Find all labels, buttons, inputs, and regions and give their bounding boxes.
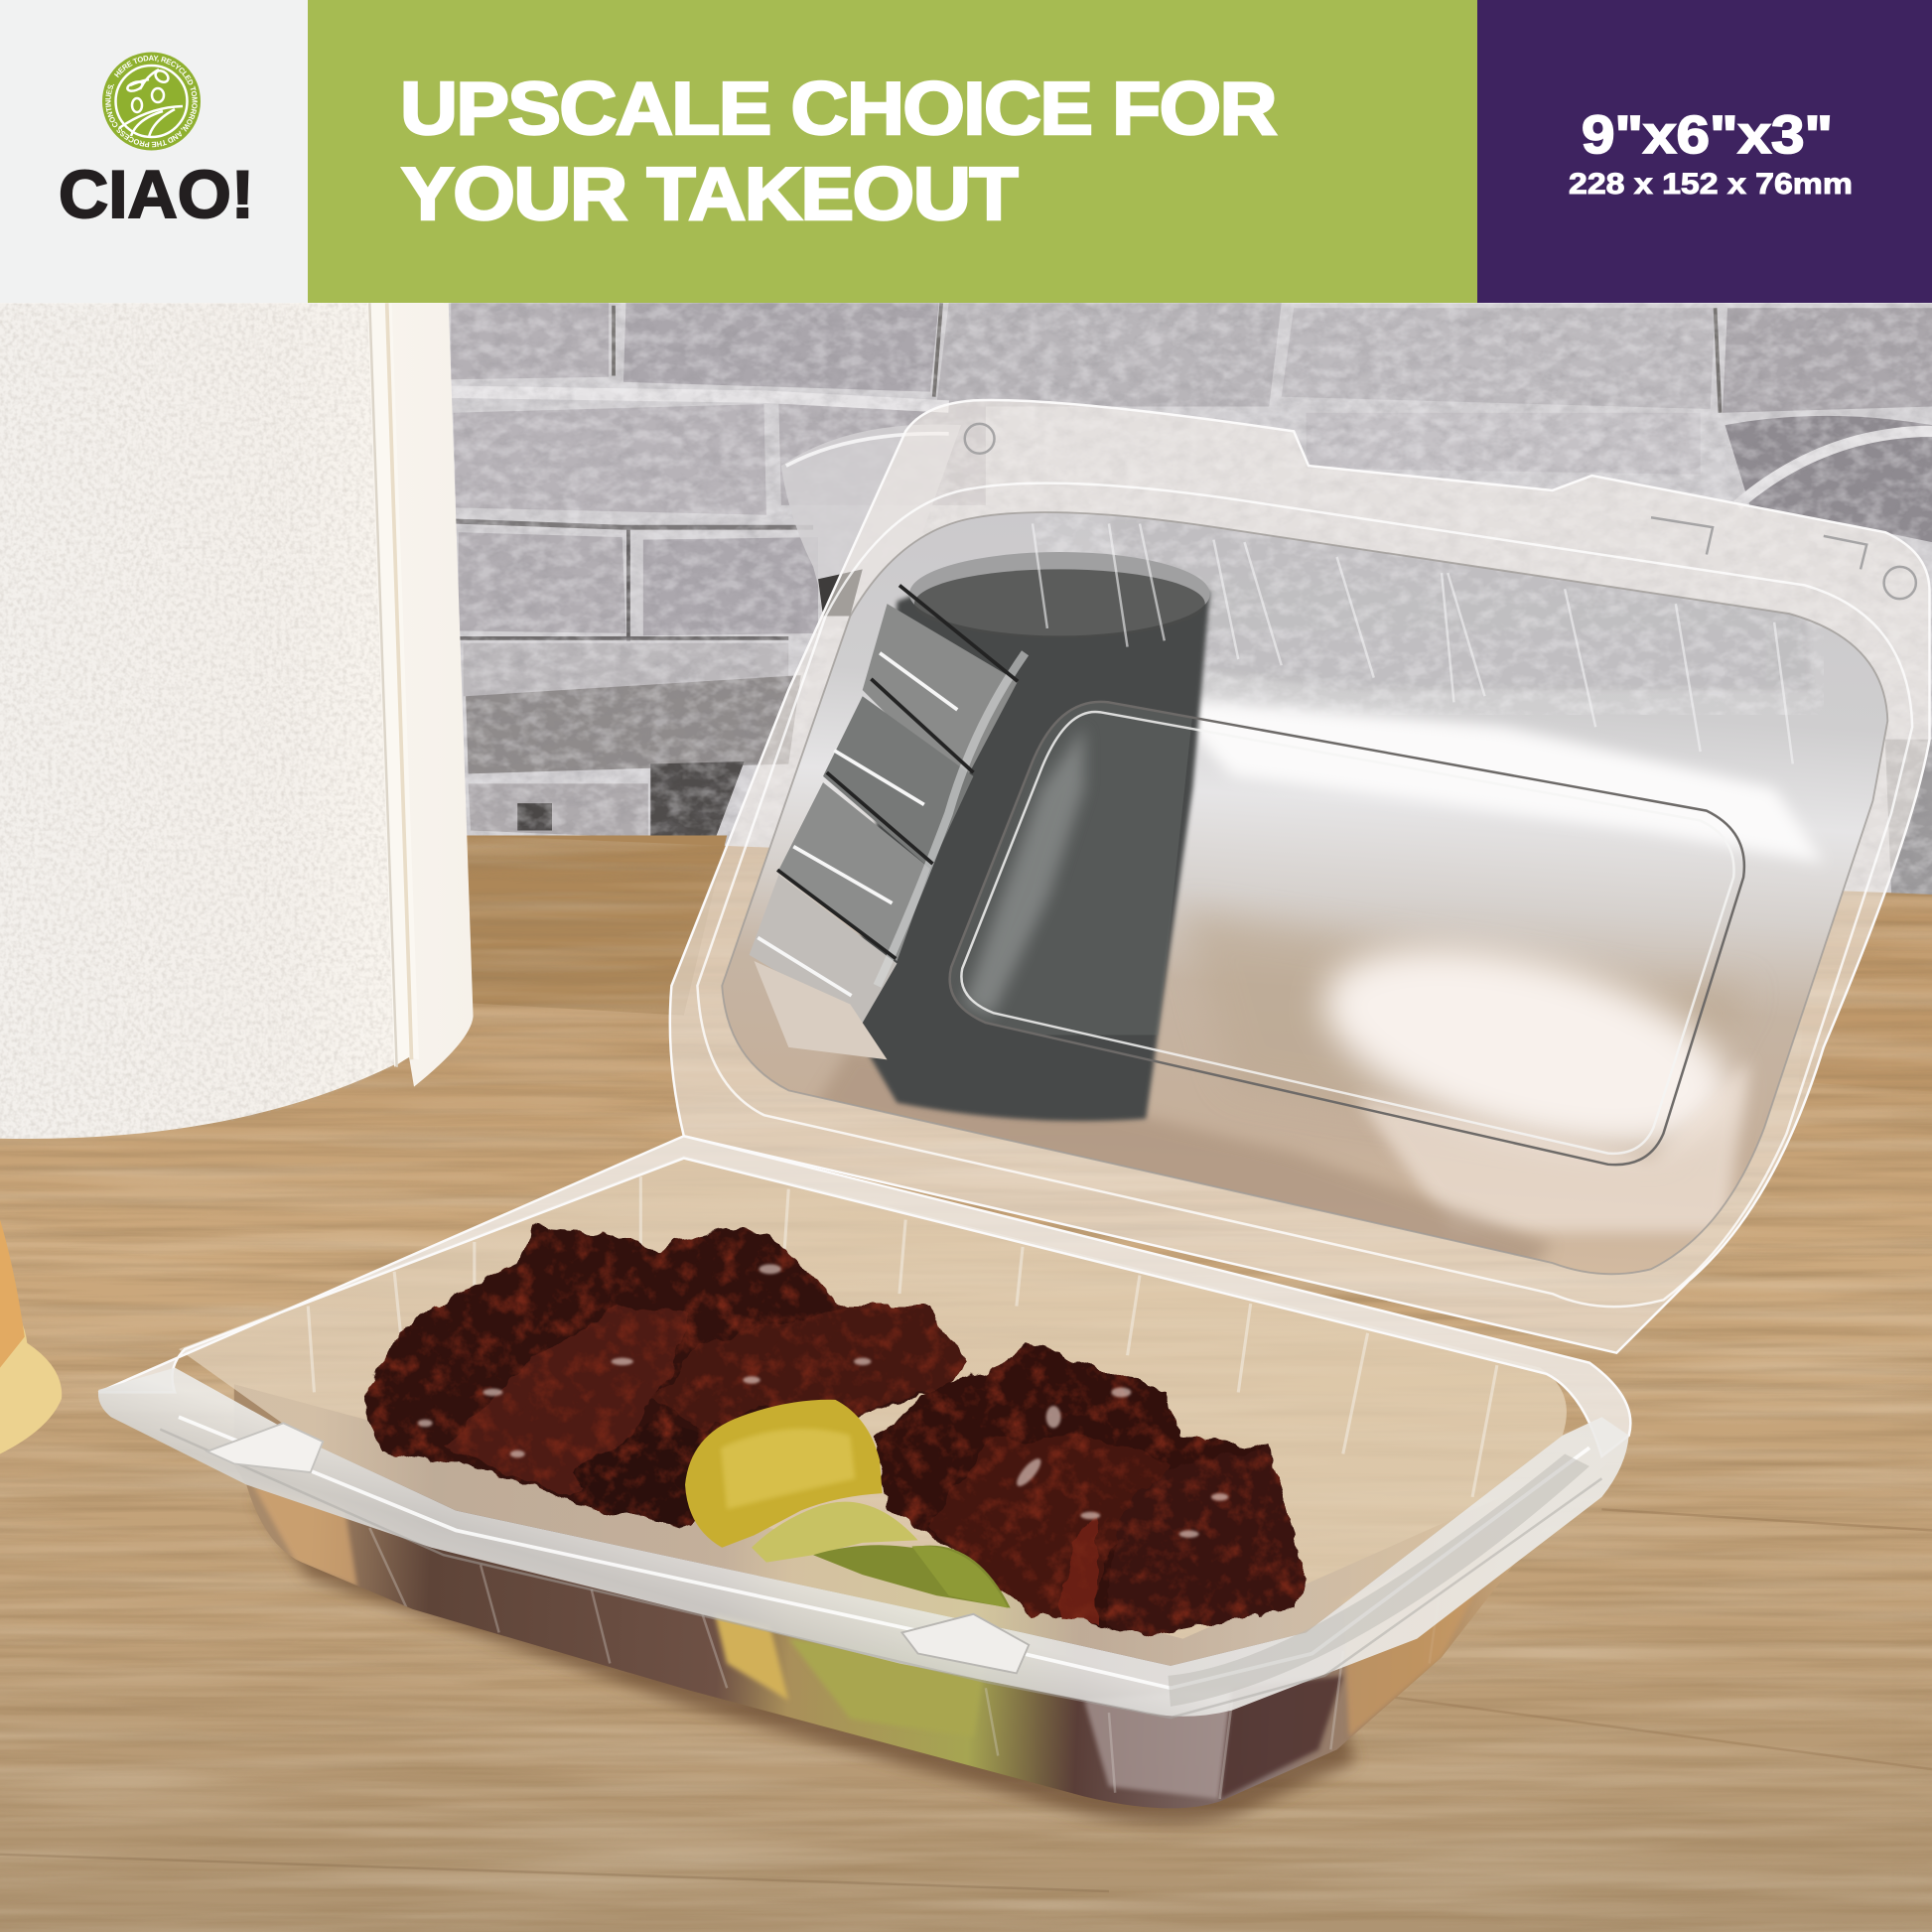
cup seen through lid window [949, 690, 1195, 1035]
soft shadow under tray [252, 1497, 1355, 1824]
clamshell lid [670, 400, 1930, 1353]
size in millimetres: 228 x 152 x 76mm [1569, 168, 1853, 201]
lid rim lines [697, 483, 1912, 1307]
back ribs [1033, 523, 1793, 763]
header: title panel [308, 0, 1477, 303]
ribs and pickles [364, 1226, 1307, 1636]
tray body seen from front [234, 1355, 1639, 1824]
glossy highlights [418, 1264, 1228, 1538]
title line 2: YOUR TAKEOUT [401, 152, 1018, 235]
header: logo panel [0, 0, 308, 303]
brick wall background [444, 303, 1932, 899]
reflected dark cup [850, 569, 1210, 1121]
tray interior [179, 1156, 1567, 1666]
lid latch dimples [965, 424, 1916, 599]
size in inches: 9"x6"x3" [1582, 105, 1833, 165]
tray front rim [98, 1368, 1629, 1718]
lid recessed interior [723, 513, 1886, 1273]
lid window [950, 702, 1744, 1165]
ribs meat [364, 1226, 1307, 1636]
tray wall ribs [308, 1176, 1497, 1497]
logo wordmark: CIAO! [59, 157, 254, 232]
lid outer rim [670, 400, 1930, 1353]
plastic drink cup behind lid [781, 424, 961, 617]
pickle slices [685, 1400, 1011, 1608]
tray base [98, 1136, 1639, 1824]
window glare on cup [964, 727, 1084, 1017]
header: size panel [1477, 0, 1932, 303]
wooden table [0, 826, 1932, 1932]
title line 1: UPSCALE CHOICE FOR [400, 67, 1276, 150]
paper towel roll [0, 303, 474, 1154]
bread roll [0, 1220, 62, 1453]
ribbed side panels [750, 586, 1026, 1059]
back rim [98, 1136, 1630, 1456]
logo emblem: HERE TODAY, RECYCLED TOMORROW, AND THE PROCESS CONTINUES. [105, 56, 198, 147]
